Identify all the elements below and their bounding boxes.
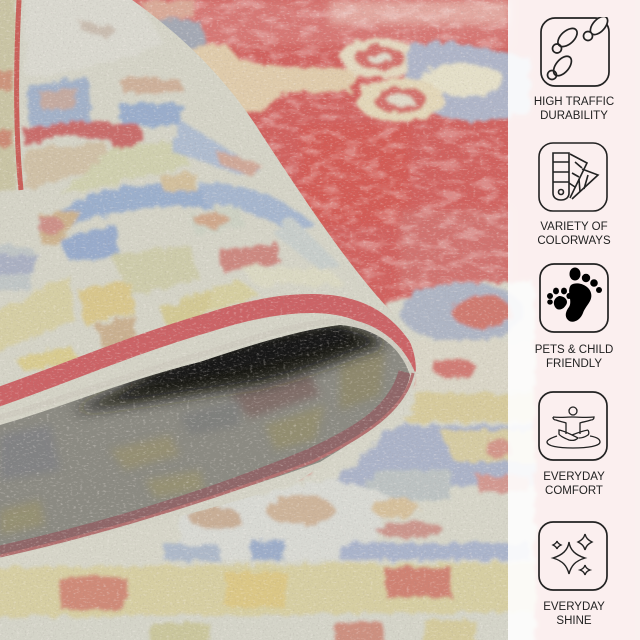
icon: sparkles <box>538 521 608 591</box>
rolled rug face <box>0 0 430 570</box>
underside of rug <box>0 325 410 554</box>
label: everyday comfort: EVERYDAY <box>543 471 605 483</box>
label: pets and child friendly <box>535 344 613 370</box>
label: everyday shine: EVERYDAY <box>543 601 605 613</box>
woven texture: light specks <box>0 0 510 640</box>
red hem band <box>0 303 414 398</box>
medallion on red field <box>140 0 530 122</box>
label: variety of colorways: COLORWAYS <box>537 235 611 247</box>
label: everyday shine: SHINE <box>556 615 592 627</box>
icon: colour swatch fan <box>538 142 608 212</box>
label: everyday comfort <box>543 471 605 497</box>
woven texture: dark specks <box>0 0 510 640</box>
label: high traffic durability: DURABILITY <box>540 110 608 122</box>
dark shadow crescent <box>70 323 385 412</box>
label: pets and child friendly: FRIENDLY <box>546 358 602 370</box>
label: high traffic durability <box>534 96 614 122</box>
icon: pet and child footprints <box>539 263 609 333</box>
label: everyday shine <box>543 601 605 627</box>
label: variety of colorways <box>537 221 611 247</box>
lower floor border <box>0 282 535 640</box>
icon: meditating figure <box>538 391 608 461</box>
label: variety of colorways: VARIETY OF <box>540 221 608 233</box>
red inner edge <box>0 373 413 556</box>
icon: footprints <box>540 17 610 87</box>
pale rim under the hem <box>356 320 415 374</box>
label: everyday comfort: COMFORT <box>545 485 603 497</box>
left stripe on roll <box>17 0 21 190</box>
panel: feature sidebar <box>508 0 640 640</box>
label: high traffic durability: HIGH TRAFFIC <box>534 96 614 108</box>
red field mottling <box>130 0 510 300</box>
label: pets and child friendly: PETS & CHILD <box>535 344 613 356</box>
